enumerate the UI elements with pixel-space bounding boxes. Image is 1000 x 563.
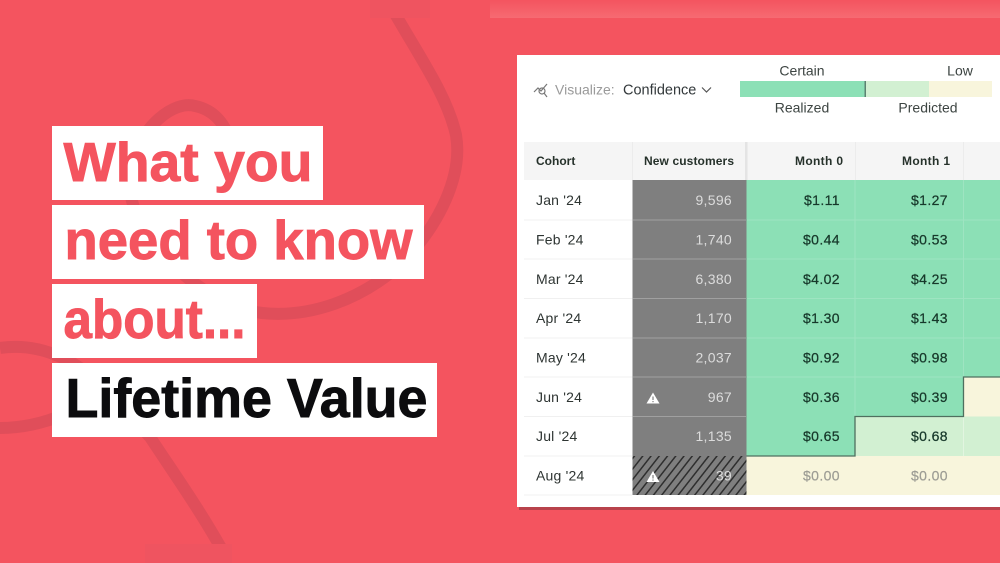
bottom smudge xyxy=(145,544,232,563)
rows: cohort labels: May '24 xyxy=(536,350,586,366)
column: month 0 values: $0.00 xyxy=(803,468,840,484)
rows: new customers values: 967 xyxy=(708,389,732,405)
column: month 1 values: $0.00 xyxy=(911,468,948,484)
rows: cohort labels: Feb '24 xyxy=(536,232,584,248)
column: month 1 values: $4.25 xyxy=(911,271,948,287)
rows: cohort labels: Jan '24 xyxy=(536,192,582,208)
icon: chevron xyxy=(702,88,711,92)
table header: Cohort xyxy=(536,154,575,168)
column: month 0 values xyxy=(803,192,840,484)
column: month 0 values: $0.65 xyxy=(803,428,840,444)
rows: cohort labels: Jun '24 xyxy=(536,389,582,405)
column: month 1 values: $0.98 xyxy=(911,350,948,366)
toolbar: visualize control xyxy=(534,82,711,98)
icon: chart sparkle xyxy=(534,84,547,97)
column: month 1 values: $0.39 xyxy=(911,389,948,405)
legend: Predicted xyxy=(898,100,958,116)
legend: Certain xyxy=(779,62,825,78)
rows: cohort labels: Mar '24 xyxy=(536,271,584,287)
column: month 0 values: $1.30 xyxy=(803,310,840,326)
icon: warning June xyxy=(646,392,660,404)
title line: Lifetime Value: Lifetime Value xyxy=(66,367,428,429)
title xyxy=(52,126,437,437)
rows: cohort labels: Apr '24 xyxy=(536,310,581,326)
column: month 0 values: $0.44 xyxy=(803,232,840,248)
table grid lines xyxy=(524,180,1000,495)
icon: warning August xyxy=(646,471,660,482)
rows: new customers values: 39 xyxy=(716,468,732,484)
top light strip xyxy=(490,0,1000,18)
column: month 0 values: $0.92 xyxy=(803,350,840,366)
rows: new customers values: 9,596 xyxy=(695,192,732,208)
rows: cohort labels: Aug '24 xyxy=(536,468,584,484)
heatmap cells xyxy=(746,180,1000,495)
legend: Realized xyxy=(775,100,829,116)
table header xyxy=(524,142,1000,180)
column: month 0 values: $1.11 xyxy=(804,192,840,208)
rows: new customers values: 1,740 xyxy=(695,232,732,248)
table header: Month 0 xyxy=(795,154,843,168)
rows: new customers values: 1,135 xyxy=(695,428,732,444)
table header: New customers xyxy=(644,154,734,168)
rows: new customers values: 2,037 xyxy=(695,350,732,366)
title line: need to know: need to know xyxy=(64,209,413,271)
toolbar: visualize control: Confidence xyxy=(623,82,696,98)
column: month 1 values xyxy=(911,192,948,484)
rows: cohort labels: Jul '24 xyxy=(536,428,577,444)
column: month 0 values: $0.36 xyxy=(803,389,840,405)
legend: Low xyxy=(947,62,974,78)
legend xyxy=(740,62,992,116)
rows: new customers values xyxy=(695,192,732,484)
column: month 1 values: $1.27 xyxy=(911,192,948,208)
toolbar: visualize control: Visualize: xyxy=(555,82,615,98)
confidence boundary line xyxy=(746,377,1000,456)
rows: new customers values: 1,170 xyxy=(695,310,732,326)
top smudge xyxy=(370,0,430,18)
table header: Month 1 xyxy=(902,154,950,168)
rows: new customers values: 6,380 xyxy=(695,271,732,287)
panel: cohort table card xyxy=(517,55,1000,510)
column: month 1 values: $0.68 xyxy=(911,428,948,444)
column: month 0 values: $4.02 xyxy=(803,271,840,287)
title line: What you: What you xyxy=(64,131,312,193)
title line: about...: about... xyxy=(64,288,246,350)
column: new customers shading xyxy=(632,180,746,495)
background swirl line xyxy=(0,5,457,555)
rows: cohort labels xyxy=(536,192,586,484)
column: month 1 values: $0.53 xyxy=(911,232,948,248)
column: month 1 values: $1.43 xyxy=(911,310,948,326)
